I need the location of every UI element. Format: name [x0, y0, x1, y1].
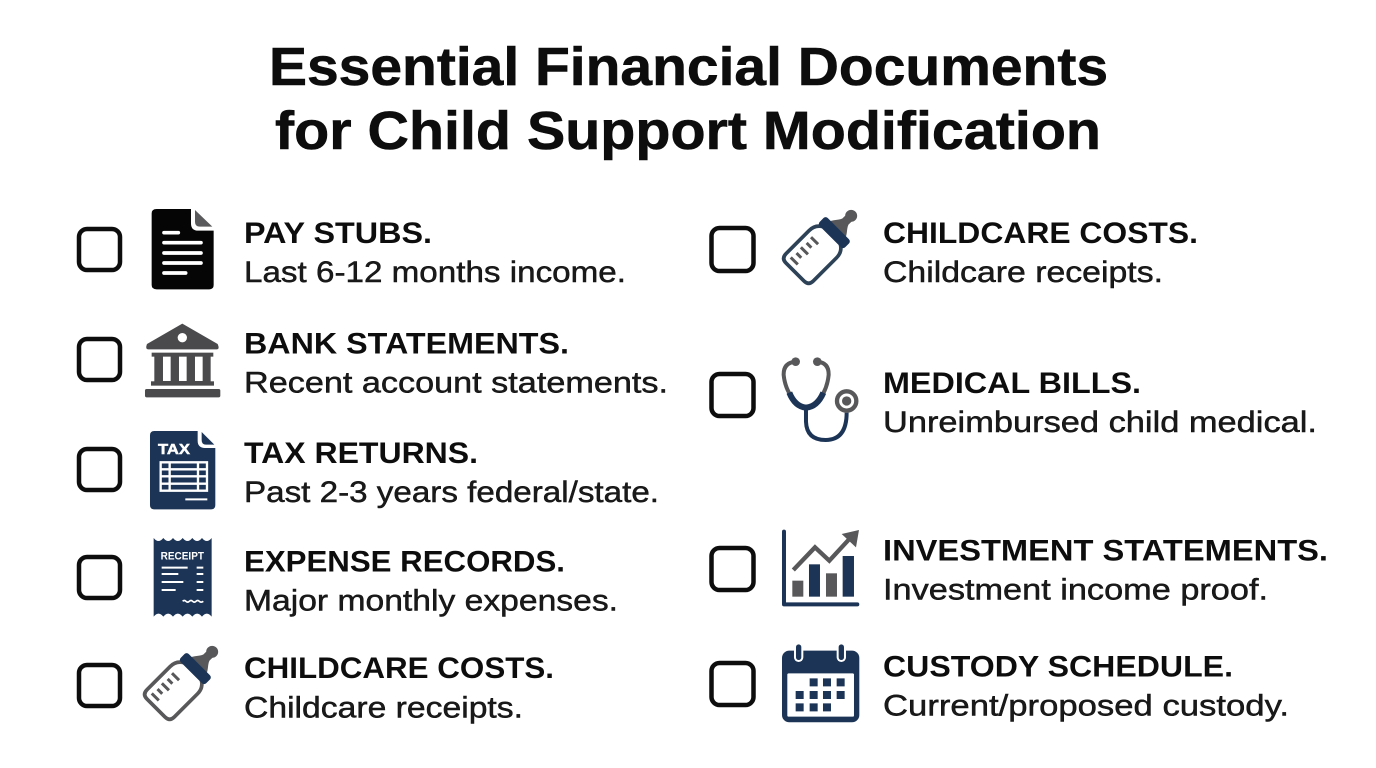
- checkbox: [79, 665, 120, 706]
- title: [269, 37, 1108, 161]
- heading: EXPENSE RECORDS.: [244, 546, 565, 578]
- checkbox: [712, 228, 754, 271]
- item: pay stubs: [79, 209, 626, 289]
- item: bank statements: [79, 324, 668, 400]
- description: Childcare receipts.: [244, 692, 523, 724]
- icon: growth chart: [784, 530, 859, 604]
- icon: calendar: [782, 643, 859, 722]
- heading: CUSTODY SCHEDULE.: [883, 650, 1233, 684]
- item: childcare costs: [79, 634, 554, 724]
- description: Childcare receipts.: [883, 256, 1163, 289]
- heading: PAY STUBS.: [244, 217, 432, 250]
- checkbox: [79, 557, 120, 598]
- heading: TAX RETURNS.: [244, 437, 478, 470]
- icon: stethoscope: [784, 357, 856, 440]
- icon: baby bottle: [781, 198, 869, 286]
- item: custody schedule: [712, 643, 1289, 722]
- icon: bank: [145, 324, 220, 397]
- checkbox: [712, 374, 754, 416]
- checkbox: [79, 339, 120, 380]
- checkbox: [712, 548, 754, 590]
- description: Recent account statements.: [244, 366, 668, 400]
- heading: MEDICAL BILLS.: [883, 367, 1141, 400]
- heading: INVESTMENT STATEMENTS.: [883, 534, 1328, 568]
- description: Unreimbursed child medical.: [883, 406, 1317, 439]
- description: Past 2-3 years federal/state.: [244, 476, 659, 509]
- icon: tax form: [150, 431, 215, 509]
- icon: receipt: [154, 538, 212, 617]
- icon: tax form: TAX: [158, 441, 190, 458]
- panel: left checklist: [79, 209, 668, 724]
- icon: baby bottle: [142, 634, 230, 722]
- description: Current/proposed custody.: [883, 690, 1289, 722]
- description: Investment income proof.: [883, 574, 1268, 606]
- heading: CHILDCARE COSTS.: [244, 652, 554, 685]
- checkbox: [79, 449, 120, 490]
- title: Essential Financial Documents: [269, 37, 1108, 97]
- description: Major monthly expenses.: [244, 584, 618, 618]
- panel: right checklist: [712, 198, 1328, 723]
- item: investment statements: [712, 530, 1328, 606]
- heading: CHILDCARE COSTS.: [883, 217, 1198, 250]
- icon: receipt: RECEIPT: [161, 550, 204, 562]
- description: Last 6-12 months income.: [244, 256, 626, 289]
- checkbox: [79, 229, 120, 270]
- heading: BANK STATEMENTS.: [244, 328, 569, 360]
- checkbox: [712, 663, 754, 705]
- title: for Child Support Modification: [275, 101, 1101, 161]
- item: tax returns: [79, 431, 659, 509]
- item: expense records: [79, 538, 618, 618]
- item: childcare costs: [712, 198, 1198, 289]
- item: medical bills: [712, 357, 1317, 440]
- icon: document: [152, 209, 214, 289]
